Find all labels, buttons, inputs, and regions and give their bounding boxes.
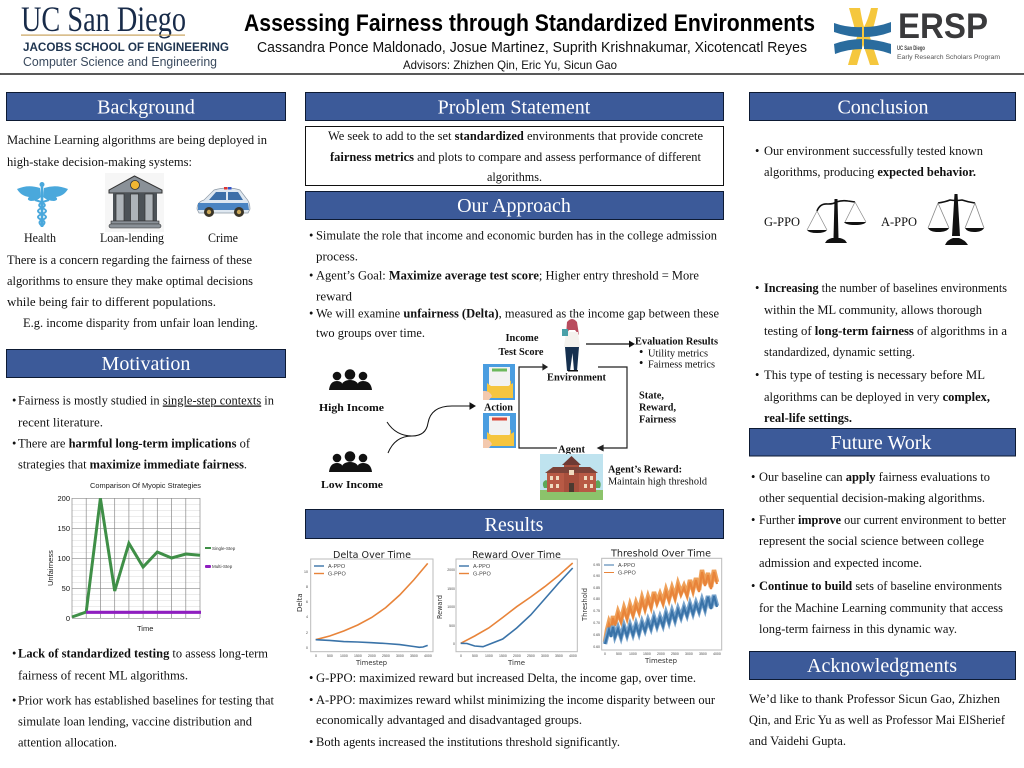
icon captions (24, 231, 238, 245)
text: acknowledgments: Qin, and Eric Yu as well as Professor Mai ElSherief (749, 713, 1006, 727)
chart: delta over time: 2 (306, 631, 308, 635)
chart: reward over time: G-PPO (473, 572, 491, 578)
text: conclusion bullets: algorithms can be deployed in very complex, (764, 390, 990, 404)
scale: G-PPO (764, 199, 866, 243)
chart: reward over time: 1000 (447, 605, 455, 609)
panel: motivation (6, 350, 286, 750)
panel: background (6, 92, 286, 330)
line chart: comparison of myopic strategies: 200 (57, 494, 70, 503)
labels: income and test score: Income (506, 333, 539, 344)
label: state reward fairness (639, 390, 676, 426)
heading: our approach: Our Approach (457, 195, 571, 217)
text: results bullets: A-PPO: maximizes reward whilst minimizing the income disparity between our (316, 693, 716, 707)
heading: background (6, 92, 286, 120)
text: standardized testing bullets: Lack of standardized testing to assess long-term (18, 646, 268, 660)
label: environment: Environment (547, 372, 607, 384)
text: standardized testing bullets: simulate loan lending, vaccine distribution and (18, 714, 253, 728)
chart: reward over time (436, 550, 577, 667)
evaluation results: • (639, 345, 643, 359)
text: conclusion bullets: real-life settings. (764, 411, 852, 425)
text: conclusion first bullet: • (755, 144, 759, 158)
text: conclusion bullets: Increasing the number of baselines environments (764, 281, 1007, 295)
line chart: comparison of myopic strategies: 50 (62, 584, 70, 593)
text: conclusion first bullet: algorithms, producing expected behavior. (764, 165, 976, 179)
line chart: comparison of myopic strategies: 150 (57, 524, 70, 533)
text: approach bullets: process. (316, 250, 358, 264)
heading: problem statement: Problem Statement (438, 96, 591, 118)
chart: threshold over time: 1500 (643, 652, 651, 656)
agent's reward: Agent’s Reward: (608, 464, 682, 476)
evaluation results (635, 336, 718, 370)
text: approach bullets: Agent’s Goal: Maximize average test score; Higher entry threshold = More (316, 268, 699, 282)
text box: problem statement (306, 126, 724, 186)
chart: threshold over time: 0 (604, 652, 606, 656)
chart: reward over time: 500 (472, 654, 478, 658)
text: standardized testing bullets: Prior work has established baselines for testing that (18, 694, 275, 708)
text: intro: Machine Learning algorithms are being deployed in (7, 133, 268, 147)
line chart: comparison of myopic strategies: 0 (66, 614, 70, 623)
chart: reward over time: 3500 (555, 654, 563, 658)
chart: threshold over time: 500 (616, 652, 622, 656)
arrow: to evaluation results (586, 340, 635, 348)
chart: threshold over time: 2000 (657, 652, 665, 656)
label: agent: Agent (558, 444, 586, 456)
text: conclusion bullets: • (755, 368, 759, 382)
scale: A-PPO: A-PPO (881, 215, 917, 229)
text: conclusion first bullet (755, 144, 984, 179)
text: results bullets: • (309, 735, 313, 749)
heading: problem statement (306, 92, 724, 120)
chart: reward over time: 0 (453, 642, 455, 646)
chart: threshold over time: 2500 (671, 652, 679, 656)
text: conclusion first bullet: Our environment successfully tested known (764, 144, 984, 158)
text: conclusion bullets: standardized, dynamic setting. (764, 345, 915, 359)
line chart: comparison of myopic strategies: Unfairness (46, 550, 55, 586)
icon: health caduceus (17, 182, 68, 227)
text box: problem statement: algorithms. (487, 170, 542, 184)
text: future work bullets: Continue to build sets of baseline environments (759, 579, 1002, 593)
panel: problem statement (306, 92, 724, 186)
line chart: comparison of myopic strategies: Comparison Of Myopic Strategies (90, 483, 202, 490)
icon: high income group (329, 369, 372, 390)
text: conclusion bullets: This type of testing is necessary before ML (764, 368, 985, 382)
chart: threshold over time: 0.60 (593, 645, 600, 649)
chart: threshold over time: 0.95 (593, 563, 600, 567)
icon: police car (197, 187, 250, 217)
label: state reward fairness: State, (639, 390, 665, 402)
text: future work bullets (751, 470, 1007, 636)
chart: reward over time: 1000 (485, 654, 493, 658)
title: Assessing Fairness through Standardized Environments (244, 10, 815, 37)
icon: rejection envelope (483, 413, 516, 448)
text: approach bullets (309, 228, 719, 340)
labels: income and test score: Test Score (498, 347, 544, 358)
line chart: comparison of myopic strategies (46, 483, 236, 633)
heading: results: Results (485, 514, 544, 536)
agent's reward: Maintain high threshold (608, 476, 707, 488)
text box: problem statement: We seek to add to the set standardized environments that provide concrete (328, 129, 703, 143)
chart: reward over time: 1500 (499, 654, 507, 658)
text: results bullets: • (309, 671, 313, 685)
line chart: comparison of myopic strategies: 100 (57, 554, 70, 563)
evaluation results: • (639, 356, 643, 370)
chart: delta over time: 6 (306, 600, 308, 604)
chart: delta over time: 10 (304, 570, 308, 574)
text: future work bullets: • (751, 513, 755, 527)
text: future work bullets: other sequential decision-making algorithms. (759, 491, 985, 505)
text: acknowledgments: and Vaidehi Gupta. (749, 734, 846, 748)
text: motivation bullets: • (12, 436, 16, 450)
authors: Cassandra Ponce Maldonado, Josue Martinez, Suprith Krishnakumar, Xicotencatl Reyes (257, 40, 807, 56)
text: results bullets: G-PPO: maximized reward but increased Delta, the income gap, over time. (316, 671, 696, 685)
labels: income and test score (498, 333, 544, 358)
icon captions: Loan-lending (100, 231, 165, 245)
chart: delta over time: 4 (306, 615, 308, 619)
chart: reward over time: 2500 (527, 654, 535, 658)
text: results bullets: • (309, 693, 313, 707)
heading: future work: Future Work (831, 432, 931, 454)
logo: ERSP: ERSP (898, 7, 988, 46)
chart: delta over time: Timestep (355, 659, 388, 667)
text: acknowledgments: We’d like to thank Professor Sicun Gao, Zhizhen (749, 692, 1001, 706)
chart: delta over time: 2000 (368, 654, 376, 658)
evaluation results: Utility metrics (648, 348, 708, 360)
evaluation results: Fairness metrics (648, 360, 715, 370)
text: future work bullets: admission and expected income. (759, 556, 922, 570)
text: standardized testing bullets: • (12, 694, 16, 708)
heading: motivation (6, 350, 286, 378)
text: approach bullets: • (309, 228, 313, 242)
chart: threshold over time: 0.65 (593, 633, 600, 637)
text: conclusion bullets: within the ML community, allows thorough (764, 303, 983, 317)
chart: reward over time: 500 (449, 624, 455, 628)
text box: problem statement: fairness metrics and plots to compare and assess performance of different (330, 150, 702, 164)
text: motivation bullets: There are harmful long-term implications of (18, 436, 251, 450)
chart: reward over time: Time (507, 659, 525, 667)
text: conclusion bullets: testing of long-term fairness of algorithms in a (764, 324, 1007, 338)
chart: threshold over time: Timestep (644, 657, 678, 665)
chart: threshold over time: 4000 (713, 652, 721, 656)
label: low income: Low Income (321, 480, 384, 491)
chart: reward over time: Reward (436, 595, 444, 619)
chart: threshold over time: 3500 (699, 652, 707, 656)
icon: college building (540, 454, 603, 500)
icon: bank (105, 173, 164, 232)
heading: results (306, 510, 724, 538)
label: state reward fairness: Fairness (639, 414, 676, 426)
chart: reward over time: 0 (460, 654, 462, 658)
chart: threshold over time: 0.70 (593, 621, 600, 625)
label: state reward fairness: Reward, (639, 402, 676, 414)
agent's reward (608, 464, 707, 488)
text: motivation bullets (12, 394, 275, 472)
chart: delta over time: 2500 (382, 654, 390, 658)
chart: delta over time: 4000 (424, 654, 432, 658)
text: future work bullets: • (751, 579, 755, 593)
text: concern: E.g. income disparity from unfair loan lending. (23, 316, 258, 330)
text: results bullets: Both agents increased the institutions threshold significantly. (316, 735, 620, 749)
text: approach bullets: reward (316, 290, 353, 304)
scale: A-PPO (881, 194, 984, 245)
heading: motivation: Motivation (102, 353, 190, 375)
text: motivation bullets: • (12, 394, 16, 408)
chart: threshold over time: 0.90 (593, 574, 600, 578)
text: approach bullets: Simulate the role that income and economic burden has in the college admission (316, 228, 718, 242)
line chart: comparison of myopic strategies: Single-Step (212, 546, 236, 551)
diagram: reinforcement learning loop (319, 319, 718, 500)
chart: reward over time: 4000 (569, 654, 577, 658)
logo: UC San Diego Jacobs School of Engineering: JACOBS SCHOOL OF ENGINEERING (23, 40, 229, 54)
heading: our approach (306, 192, 724, 220)
text: results bullets (309, 671, 716, 749)
panel: acknowledgments (749, 652, 1016, 748)
text: standardized testing bullets: attention allocation. (18, 736, 117, 750)
chart: delta over time: 8 (306, 585, 308, 589)
chart: reward over time: Reward Over Time (472, 550, 561, 561)
chart: threshold over time: 0.85 (593, 586, 600, 590)
text: approach bullets: We will examine unfairness (Delta), measured as the income gap between these (316, 306, 719, 320)
text: motivation bullets: strategies that maximize immediate fairness. (18, 458, 247, 472)
chart: reward over time: 1500 (447, 587, 455, 591)
text: future work bullets: long-term fairness in this dynamic way. (759, 622, 957, 636)
panel: future work (750, 428, 1016, 636)
chart: reward over time: 2000 (447, 568, 455, 572)
arrow: environment to agent (598, 367, 627, 450)
chart: threshold over time: 0.75 (593, 609, 600, 613)
text: concern: algorithms to ensure they make optimal decisions (7, 274, 253, 288)
chart: delta over time: Delta (296, 593, 304, 612)
line chart: comparison of myopic strategies: Multi-Step (212, 564, 233, 569)
logo: ERSP (834, 7, 1000, 65)
panel: our approach (306, 192, 724, 500)
heading: acknowledgments: Acknowledgments (807, 655, 957, 677)
chart: delta over time: A-PPO (328, 564, 346, 570)
icon: acceptance envelope (483, 364, 515, 400)
chart: reward over time: 3000 (541, 654, 549, 658)
chart: threshold over time: 0.80 (593, 597, 600, 601)
text: conclusion bullets (755, 281, 1007, 425)
label: action: Action (484, 402, 513, 414)
header banner (0, 0, 1024, 74)
arrow: groups merging into action (387, 403, 475, 453)
heading: conclusion: Conclusion (837, 96, 929, 118)
text: future work bullets: for the Machine Learning community that access (759, 601, 1003, 615)
heading: future work (750, 428, 1016, 456)
text: standardized testing bullets: • (12, 646, 16, 660)
text: approach bullets: two groups over time. (316, 326, 425, 340)
heading: conclusion (750, 92, 1016, 120)
text: future work bullets: Further improve our current environment to better (759, 513, 1007, 527)
chart: delta over time: 0 (315, 654, 317, 658)
text: standardized testing bullets (12, 646, 275, 750)
text: future work bullets: • (751, 470, 755, 484)
logo: UC San Diego Jacobs School of Engineering (21, 0, 229, 69)
chart: threshold over time (581, 548, 722, 665)
label: high income: High Income (319, 403, 385, 414)
chart: delta over time: 1000 (340, 654, 348, 658)
text: motivation bullets: Fairness is mostly studied in single-step contexts in (18, 394, 275, 408)
text: standardized testing bullets: fairness of recent ML algorithms. (18, 668, 188, 682)
advisors: Advisors: Zhizhen Qin, Eric Yu, Sicun Gao (403, 58, 617, 72)
chart: delta over time: 0 (306, 646, 308, 650)
text: concern: There is a concern regarding the fairness of these (7, 253, 252, 267)
chart: delta over time: 500 (327, 654, 333, 658)
text: acknowledgments (749, 692, 1006, 748)
evaluation results: Evaluation Results (635, 336, 718, 348)
panel: conclusion (750, 92, 1016, 425)
chart: threshold over time: Threshold Over Time (610, 548, 711, 560)
logo: ERSP: Early Research Scholars Program (897, 54, 1000, 61)
chart: threshold over time: A-PPO (618, 563, 636, 569)
line chart: comparison of myopic strategies: Time (137, 624, 153, 633)
text: future work bullets: represent the social science between college (759, 534, 984, 548)
chart: delta over time (296, 550, 433, 667)
chart: reward over time: A-PPO (473, 564, 491, 570)
text: motivation bullets: recent literature. (18, 416, 103, 430)
text: future work bullets: Our baseline can apply fairness evaluations to (759, 470, 990, 484)
text: results bullets: economically advantaged and disadvantaged groups. (316, 713, 582, 727)
chart: threshold over time: Threshold (581, 588, 589, 622)
chart: delta over time: G-PPO (328, 572, 346, 578)
text: concern: while being fair to different populations. (7, 295, 216, 309)
text: intro: high-stake decision-making systems: (7, 155, 192, 169)
icon captions: Crime (208, 231, 238, 245)
text: intro (7, 133, 268, 169)
scale: G-PPO: G-PPO (764, 215, 800, 229)
chart: reward over time: 2000 (513, 654, 521, 658)
chart: delta over time: Delta Over Time (333, 550, 411, 561)
icon: low income group (329, 451, 372, 472)
text: approach bullets: • (309, 306, 313, 320)
chart: delta over time: 3000 (396, 654, 404, 658)
panel: results (296, 510, 724, 749)
text: approach bullets: • (309, 268, 313, 282)
heading: acknowledgments (750, 652, 1016, 680)
heading: background: Background (97, 96, 195, 118)
chart: delta over time: 1500 (354, 654, 362, 658)
text: conclusion bullets: • (755, 281, 759, 295)
chart: threshold over time: 1000 (629, 652, 637, 656)
chart: threshold over time: G-PPO (618, 570, 636, 576)
icon captions: Health (24, 231, 57, 245)
logo: ERSP: UC San Diego (897, 46, 925, 52)
text: concern (7, 253, 258, 330)
icon: student (562, 319, 580, 372)
arrow: agent to environment (519, 364, 557, 448)
logo: UC San Diego Jacobs School of Engineering: Computer Science and Engineering (23, 55, 217, 69)
logo: UC San Diego Jacobs School of Engineering: UC San Diego (21, 0, 186, 39)
chart: delta over time: 3500 (410, 654, 418, 658)
chart: threshold over time: 3000 (685, 652, 693, 656)
